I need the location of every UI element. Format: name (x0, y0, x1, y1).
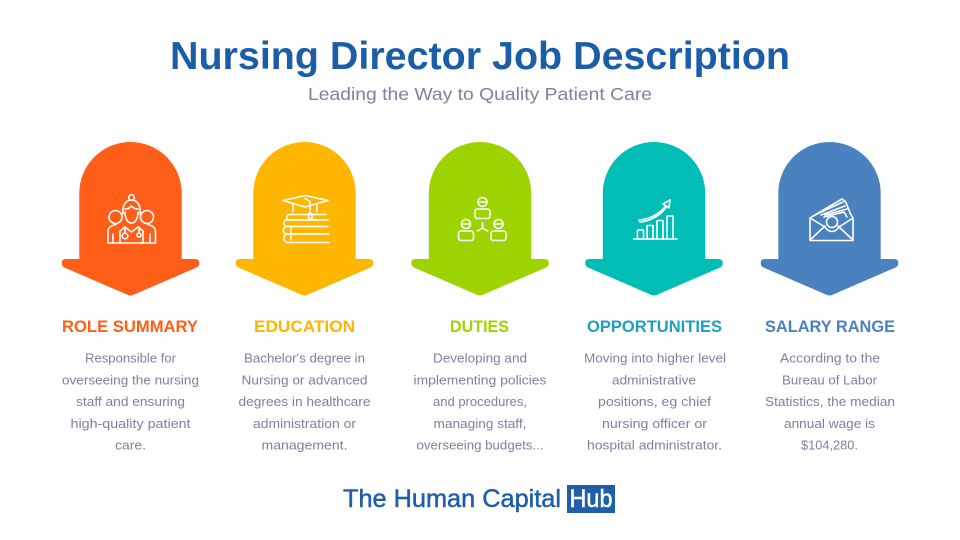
description: overseeing budgets... (416, 438, 544, 452)
icon: medical team (108, 195, 156, 243)
description: implementing policies (414, 372, 547, 388)
heading: SALARY RANGE (765, 317, 895, 336)
description: Bachelor's degree in (244, 350, 365, 366)
panel: opportunities (584, 142, 726, 452)
panel: role summary (62, 142, 199, 452)
description: Moving into higher level (584, 350, 726, 366)
description: Nursing or advanced (242, 372, 368, 388)
description: management. (262, 438, 348, 452)
description: Responsible for (85, 350, 177, 366)
description (765, 350, 895, 452)
title: Nursing Director Job Description (170, 35, 790, 78)
icon: connected team (458, 198, 506, 240)
logo: The Human Capital Hub: Hub (570, 485, 612, 513)
description: administration or (253, 416, 357, 431)
panel: duties (411, 142, 549, 452)
description: $104,280. (801, 438, 858, 452)
heading: OPPORTUNITIES (587, 317, 722, 336)
description: administrative (612, 372, 696, 388)
description: annual wage is (784, 416, 876, 431)
description: Bureau of Labor (782, 372, 878, 388)
arrow: orange (62, 142, 199, 296)
arrow: yellow (236, 142, 373, 296)
description (238, 350, 370, 452)
heading: EDUCATION (254, 317, 355, 336)
arrow: green (411, 142, 549, 296)
description: staff and ensuring (76, 394, 185, 409)
icon: graduation cap on books (283, 196, 329, 242)
description: nursing officer or (602, 416, 708, 431)
description: high-quality patient (70, 416, 191, 431)
description: hospital administrator. (587, 438, 722, 452)
description: managing staff, (434, 416, 526, 431)
description: Developing and (433, 350, 527, 366)
subtitle: Leading the Way to Quality Patient Care (308, 84, 652, 104)
logo: The Human Capital Hub: The Human Capital (343, 485, 561, 513)
arrow: blue (761, 142, 898, 296)
description (414, 350, 547, 452)
icon: growth chart (634, 200, 677, 239)
description: care. (115, 438, 146, 452)
description (584, 350, 726, 452)
description: and procedures, (433, 394, 527, 409)
description: According to the (780, 350, 880, 366)
description: Statistics, the median (765, 394, 895, 409)
description: degrees in healthcare (238, 394, 370, 409)
icon: money envelope (810, 199, 853, 240)
heading: DUTIES (450, 317, 509, 336)
description: positions, eg chief (598, 394, 711, 409)
panel: education (236, 142, 373, 452)
arrow: teal (585, 142, 723, 296)
description: overseeing the nursing (62, 372, 199, 388)
heading: ROLE SUMMARY (62, 317, 199, 336)
panel: salary range (761, 142, 898, 452)
description (62, 350, 199, 452)
